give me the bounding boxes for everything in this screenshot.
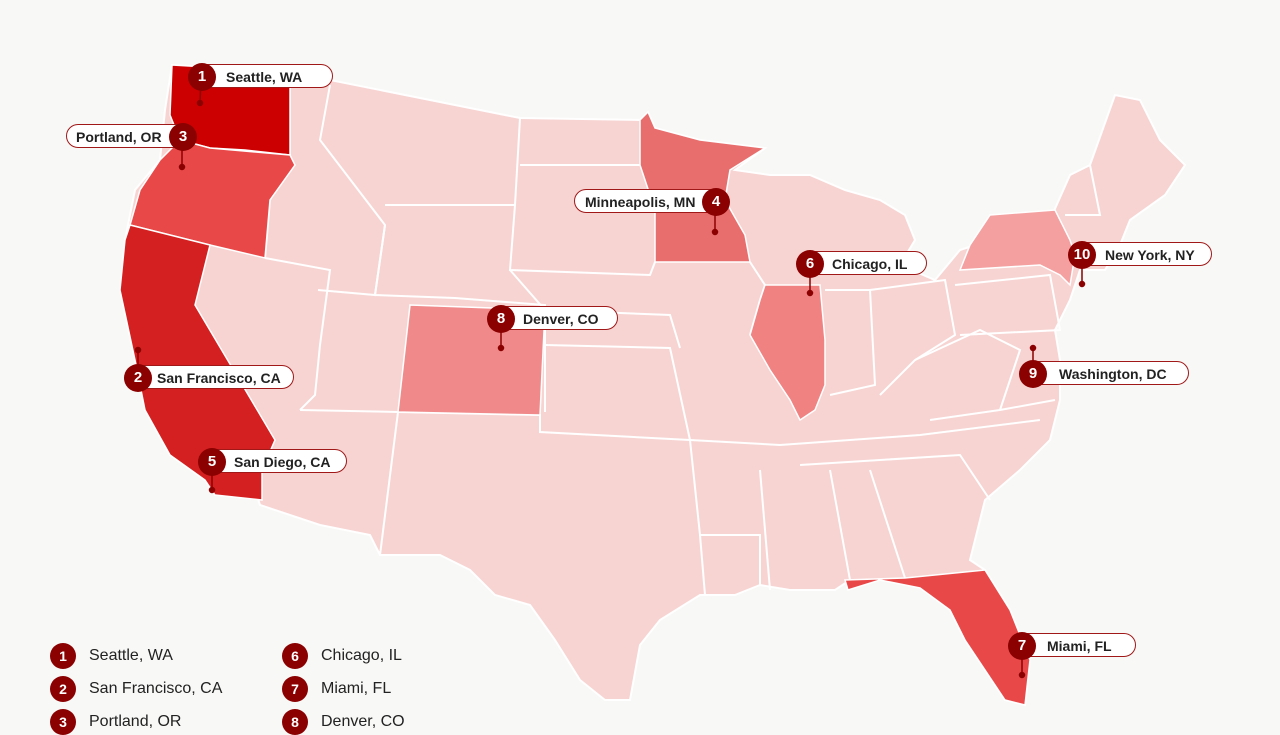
legend: Miami, FL [321, 680, 391, 697]
state: OR [130, 140, 295, 258]
state: WA [170, 65, 290, 155]
US base [120, 65, 1185, 705]
legend: 6 [291, 648, 299, 664]
label 10 New York: 10 [1074, 246, 1090, 263]
label 7 Miami: Miami, FL [1047, 638, 1112, 654]
label 1 Seattle: Seattle, WA [226, 69, 302, 85]
label 4 Minneapolis: 4 [712, 193, 720, 210]
state: IL [750, 285, 825, 420]
legend: 2 [59, 681, 67, 697]
label 3 Portland: Portland, OR [76, 129, 162, 145]
label 3 Portland [66, 124, 190, 148]
text: 8 [291, 714, 299, 730]
label 10 New York [1075, 242, 1212, 266]
label 2 San Francisco: San Francisco, CA [157, 370, 281, 386]
legend: Seattle, WA [89, 647, 173, 664]
label 10 New York: New York, NY [1105, 247, 1195, 263]
text: Portland, OR [89, 713, 181, 730]
label 8 Denver: 8 [497, 310, 505, 327]
state: CA [120, 225, 275, 500]
label 4 Minneapolis: Minneapolis, MN [585, 194, 695, 210]
label 2 San Francisco [131, 365, 294, 389]
state: FL [845, 570, 1030, 705]
state: NY [960, 210, 1075, 285]
label 8 Denver: Denver, CO [523, 311, 598, 327]
label 3 Portland: 3 [179, 128, 187, 145]
label 7 Miami [1015, 633, 1136, 657]
label 5 San Diego: San Diego, CA [234, 454, 330, 470]
label 9 Washington [1026, 361, 1189, 385]
label 9 Washington: Washington, DC [1059, 366, 1167, 382]
label 6 Chicago [803, 251, 927, 275]
label 1 Seattle [195, 64, 333, 88]
text: 3 [59, 714, 67, 730]
label 1 Seattle: 1 [198, 68, 206, 85]
state: MN [640, 112, 765, 262]
legend: San Francisco, CA [89, 680, 222, 697]
label 2 San Francisco: 2 [134, 369, 142, 386]
label 6 Chicago: 6 [806, 255, 814, 272]
legend: 7 [291, 681, 299, 697]
text: Denver, CO [321, 713, 405, 730]
label 4 Minneapolis [574, 189, 724, 213]
label 5 San Diego [205, 449, 347, 473]
label 7 Miami: 7 [1018, 637, 1026, 654]
label 8 Denver [494, 306, 618, 330]
legend [50, 643, 405, 735]
label 5 San Diego: 5 [208, 453, 216, 470]
label 9 Washington: 9 [1029, 365, 1037, 382]
legend: 1 [59, 648, 67, 664]
label 6 Chicago: Chicago, IL [832, 256, 907, 272]
state: CO [398, 305, 545, 415]
legend: Chicago, IL [321, 647, 402, 664]
